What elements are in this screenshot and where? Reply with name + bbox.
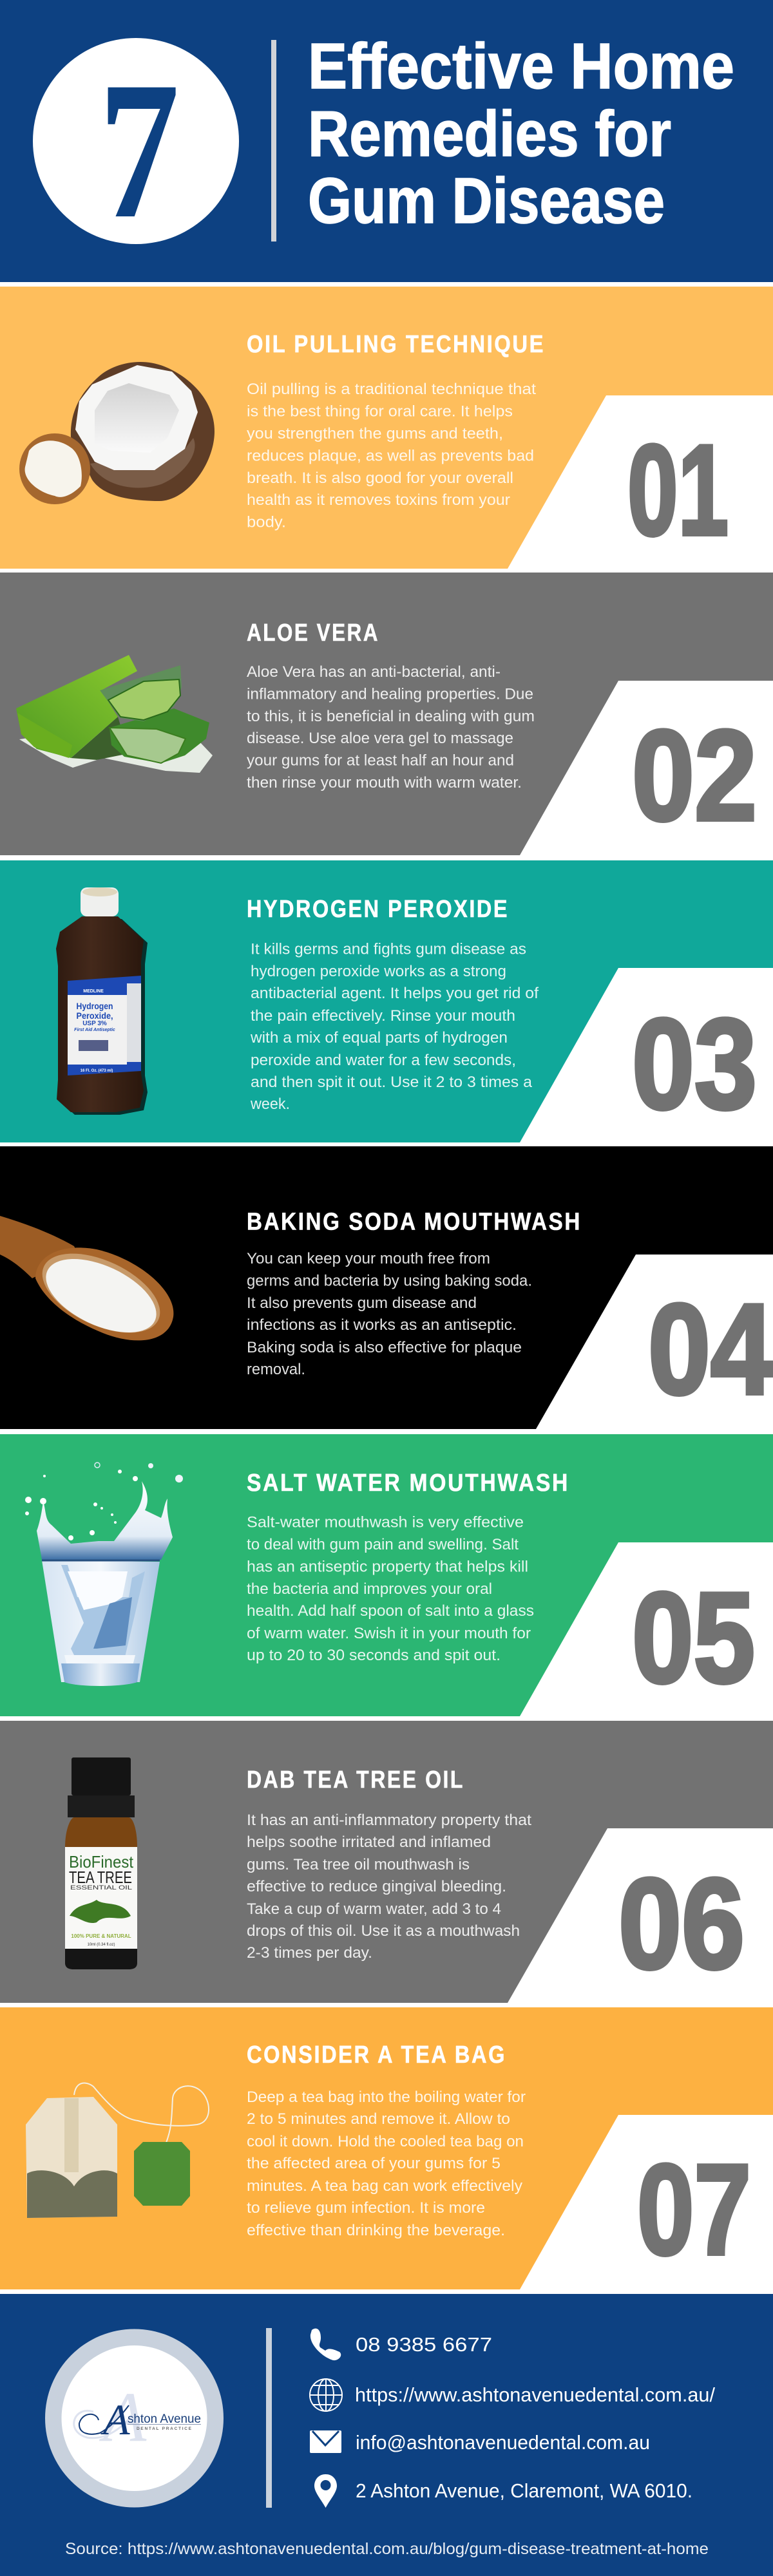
text block: gums. Tea tree oil mouthwash is [247, 1856, 470, 1873]
text block: minutes. A tea bag can work effectively [247, 2177, 522, 2195]
text block: Deep a tea bag into the boiling water for [247, 2088, 526, 2106]
text block [250, 940, 539, 1113]
text block: effective to reduce gingival bleeding. [247, 1878, 506, 1895]
icon: tea tree oil bottle: ESSENTIAL OIL [70, 1884, 132, 1891]
logo: Ashton Avenue Dental Practice: A [100, 2395, 130, 2444]
icon: spoon of baking soda [0, 1216, 173, 1349]
icon: hydrogen peroxide bottle: USP 3% [82, 1020, 107, 1027]
text block: It has an anti-inflammatory property that [247, 1812, 531, 1829]
text block: It kills germs and fights gum disease as [251, 940, 526, 958]
number 05: 05 [632, 1566, 755, 1710]
text block: disease. Use aloe vera gel to massage [247, 730, 513, 747]
number 06: 06 [618, 1852, 745, 1996]
text block: and then spit it out. Use it 2 to 3 times a [251, 1074, 533, 1091]
text block: has an antiseptic property that helps kill [247, 1558, 528, 1575]
text block: breath. It is also good for your overall [247, 469, 513, 487]
text block: Take a cup of warm water, add 3 to 4 [247, 1900, 501, 1918]
text block: the affected area of your gums for 5 [247, 2155, 501, 2172]
text block: germs and bacteria by using baking soda. [247, 1273, 532, 1289]
icon: tea bag with tag [26, 2083, 209, 2218]
text block: drops of this oil. Use it as a mouthwash [247, 1922, 520, 1940]
text block: the pain effectively. Rinse your mouth [251, 1007, 515, 1025]
text block: You can keep your mouth free from [247, 1250, 490, 1267]
icon: aloe vera [16, 655, 213, 773]
text block: health. Add half spoon of salt into a glass [247, 1602, 534, 1620]
panel: 06 dab tea tree oil [0, 1721, 773, 2007]
text block: Salt-water mouthwash is very effective [247, 1513, 524, 1531]
panel: 01 oil pulling technique [0, 287, 773, 574]
text block: Baking soda is also effective for plaque [247, 1339, 522, 1356]
number 02: 02 [632, 704, 757, 848]
logo: Ashton Avenue Dental Practice: A [99, 2378, 147, 2456]
badge: number 7 [33, 38, 239, 260]
title: Effective Home [308, 30, 734, 102]
text block: body. [247, 514, 286, 531]
text block: the bacteria and improves your oral [247, 1580, 492, 1598]
text block: 2-3 times per day. [247, 1944, 372, 1962]
heading: CONSIDER A TEA BAG [247, 2041, 506, 2069]
text block: Aloe Vera has an anti-bacterial, anti- [247, 663, 501, 681]
text block: helps soothe irritated and inflamed [247, 1833, 491, 1851]
panel: 02 aloe vera [0, 573, 773, 860]
icon: glass of water with splash [25, 1463, 183, 1686]
text block: your gums for at least half an hour and [247, 752, 514, 769]
text block: up to 20 to 30 seconds and spit out. [247, 1647, 501, 1664]
badge: number 7: 7 [99, 41, 180, 260]
heading: ALOE VERA [247, 620, 379, 647]
text block: removal. [247, 1361, 305, 1378]
text block [247, 1812, 531, 1962]
contact: address: 2 Ashton Avenue, Claremont, WA 6010. [356, 2479, 692, 2502]
logo: Ashton Avenue Dental Practice: DENTAL PRACTICE [137, 2427, 192, 2431]
text block: cool it down. Hold the cooled tea bag on [247, 2133, 524, 2150]
text block: It also prevents gum disease and [247, 1294, 477, 1312]
icon: hydrogen peroxide bottle: Hydrogen [76, 1001, 113, 1011]
text block [247, 1250, 532, 1378]
number 03: 03 [632, 992, 757, 1136]
text block: to relieve gum infection. It is more [247, 2199, 485, 2217]
text block: effective than drinking the beverage. [247, 2222, 505, 2239]
text block: health as it removes toxins from your [247, 491, 510, 509]
logo: Ashton Avenue Dental Practice: shton Avenue [128, 2412, 201, 2426]
title [308, 30, 734, 237]
contact: email: info@ashtonavenuedental.com.au [356, 2431, 650, 2454]
title: Remedies for [308, 98, 671, 170]
panel: 03 hydrogen peroxide [0, 860, 773, 1146]
text block: reduces plaque, as well as prevents bad [247, 447, 534, 465]
icon: globe [310, 2379, 342, 2411]
text block: week. [250, 1095, 290, 1113]
text block: antibacterial agent. It helps you get rid of [251, 985, 539, 1002]
logo: Ashton Avenue Dental Practice [45, 2329, 224, 2508]
text block [247, 381, 536, 531]
icon: hydrogen peroxide bottle [56, 887, 148, 1115]
panel: 05 salt water mouthwash [0, 1434, 773, 1721]
source line: Source: https://www.ashtonavenuedental.com.au/blog/gum-disease-treatment-at-home [65, 2540, 709, 2558]
text block: hydrogen peroxide works as a strong [251, 963, 506, 980]
text block: Oil pulling is a traditional technique that [247, 381, 536, 398]
text block: infections as it works as an antiseptic. [247, 1316, 517, 1334]
contact: website: https://www.ashtonavenuedental.com.au/ [355, 2383, 715, 2406]
icon: hydrogen peroxide bottle: First Aid Antiseptic [74, 1028, 115, 1032]
text block: of warm water. Swish it in your mouth for [247, 1625, 531, 1642]
text block: with a mix of equal parts of hydrogen [250, 1029, 508, 1046]
panel: 04 baking soda mouthwash [0, 1146, 773, 1434]
text block [247, 1513, 534, 1664]
text block: to this, it is beneficial in dealing with gum [247, 708, 535, 725]
text block [247, 663, 535, 791]
text block: peroxide and water for a few seconds, [251, 1052, 516, 1069]
icon: location pin [314, 2474, 337, 2508]
icon: tea tree oil bottle: 100% PURE & NATURAL [71, 1933, 131, 1939]
icon: hydrogen peroxide bottle: 16 Fl. Oz. (473 ml) [81, 1069, 113, 1073]
number 01: 01 [627, 419, 729, 562]
text block: is the best thing for oral care. It helps [247, 403, 513, 420]
panel: header [0, 0, 773, 282]
icon: tea tree oil bottle: 10ml (0.34 fl.oz) [87, 1943, 115, 1947]
text block: 2 to 5 minutes and remove it. Allow to [247, 2110, 510, 2128]
icon: tea tree oil bottle: TEA TREE [69, 1868, 132, 1887]
text block: inflammatory and healing properties. Due [247, 685, 533, 703]
text block: to deal with gum pain and swelling. Salt [247, 1536, 519, 1553]
heading: OIL PULLING TECHNIQUE [247, 331, 545, 358]
panel: 07 consider a tea bag [0, 2007, 773, 2294]
icon: coconut and bowl [19, 362, 215, 504]
icon: mail [310, 2430, 341, 2453]
icon: hydrogen peroxide bottle: MEDLINE [83, 989, 104, 994]
heading: HYDROGEN PEROXIDE [247, 896, 509, 923]
text block: you strengthen the gums and teeth, [247, 425, 503, 442]
icon: tea tree oil bottle [65, 1757, 137, 1969]
icon: tea tree oil bottle: BioFinest [69, 1852, 134, 1871]
heading: SALT WATER MOUTHWASH [247, 1470, 569, 1497]
icon: hydrogen peroxide bottle: Peroxide, [76, 1010, 113, 1021]
title: Gum Disease [308, 165, 665, 237]
text block: then rinse your mouth with warm water. [247, 774, 522, 791]
panel: footer contact [0, 2294, 773, 2576]
icon: phone [310, 2329, 341, 2360]
heading: DAB TEA TREE OIL [247, 1766, 464, 1794]
heading: BAKING SODA MOUTHWASH [247, 1208, 582, 1235]
text block [247, 2088, 526, 2239]
contact: phone number: 08 9385 6677 [356, 2333, 492, 2356]
